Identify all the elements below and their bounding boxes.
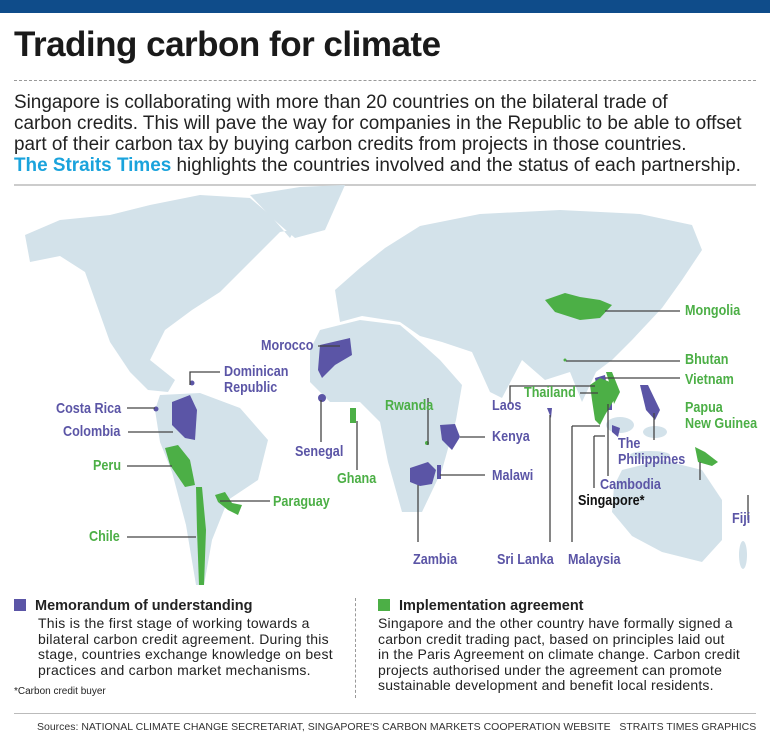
intro text: Singapore is collaborating with more than 20 countries on the bilateral trade of xyxy=(14,92,668,113)
legend: implementation: carbon credit trading pact, based on principles laid out xyxy=(378,630,725,646)
text: Rwanda xyxy=(385,397,433,414)
text: New Guinea xyxy=(685,415,757,432)
text: Republic xyxy=(224,379,277,396)
green countries xyxy=(165,293,718,585)
text: Cambodia xyxy=(600,476,661,493)
text: Thailand xyxy=(524,384,576,401)
text: Malawi xyxy=(492,467,533,484)
legend: MOU: This is the first stage of working towards a xyxy=(38,615,310,631)
purple countries xyxy=(154,338,660,486)
text: Laos xyxy=(492,397,521,414)
text: The xyxy=(618,435,640,452)
sources: Sources: NATIONAL CLIMATE CHANGE SECRETARIAT, SINGAPORE'S CARBON MARKETS COOPERATION WEBSITE STRAITS TIMES GRAPHICS xyxy=(37,721,756,733)
text: Singapore* xyxy=(578,492,645,509)
text: Mongolia xyxy=(685,302,740,319)
legend: MOU xyxy=(14,598,333,678)
text: Dominican xyxy=(224,363,288,380)
legend: implementation: sustainable development and benefit local residents. xyxy=(378,677,714,693)
legend: implementation xyxy=(378,598,740,693)
text: Ghana xyxy=(337,470,376,487)
intro text: The Straits Times highlights the countries involved and the status of each partnership. xyxy=(14,155,741,176)
intro text: part of their carbon tax by buying carbon credits from projects in those countries. xyxy=(14,134,687,155)
legend: implementation: Singapore and the other country have formally signed a xyxy=(378,615,733,631)
leader lines xyxy=(127,311,748,542)
text: Colombia xyxy=(63,423,120,440)
legend: MOU: practices and carbon market mechanisms. xyxy=(38,662,311,678)
text: Philippines xyxy=(618,451,685,468)
text: Peru xyxy=(93,457,121,474)
country labels: Morocco xyxy=(261,337,314,354)
text: Sri Lanka xyxy=(497,551,554,568)
text: Chile xyxy=(89,528,120,545)
map xyxy=(25,185,749,585)
text: Costa Rica xyxy=(56,400,121,417)
title: Trading carbon for climate xyxy=(14,25,441,64)
text: Fiji xyxy=(732,510,750,527)
legend: implementation: in the Paris Agreement on climate change. Carbon credit xyxy=(378,646,740,662)
text: Malaysia xyxy=(568,551,621,568)
intro text: carbon credits. This will pave the way for companies in the Republic to be able to offset xyxy=(14,113,742,134)
text: *Carbon credit buyer xyxy=(14,686,106,697)
top bar xyxy=(0,0,770,13)
text: Bhutan xyxy=(685,351,728,368)
text: Vietnam xyxy=(685,371,734,388)
legend: MOU: Memorandum of understanding xyxy=(35,598,252,614)
legend: MOU: stage, countries exchange knowledge on best xyxy=(38,646,333,662)
text: Senegal xyxy=(295,443,343,460)
legend: implementation: Implementation agreement xyxy=(399,598,584,614)
text: Papua xyxy=(685,399,723,416)
text: Kenya xyxy=(492,428,530,445)
legend: MOU: bilateral carbon credit agreement. During this xyxy=(38,630,329,646)
text: Paraguay xyxy=(273,493,330,510)
text: Zambia xyxy=(413,551,457,568)
intro text xyxy=(14,92,742,176)
legend: implementation: projects authorised under the agreement can promote xyxy=(378,662,722,678)
